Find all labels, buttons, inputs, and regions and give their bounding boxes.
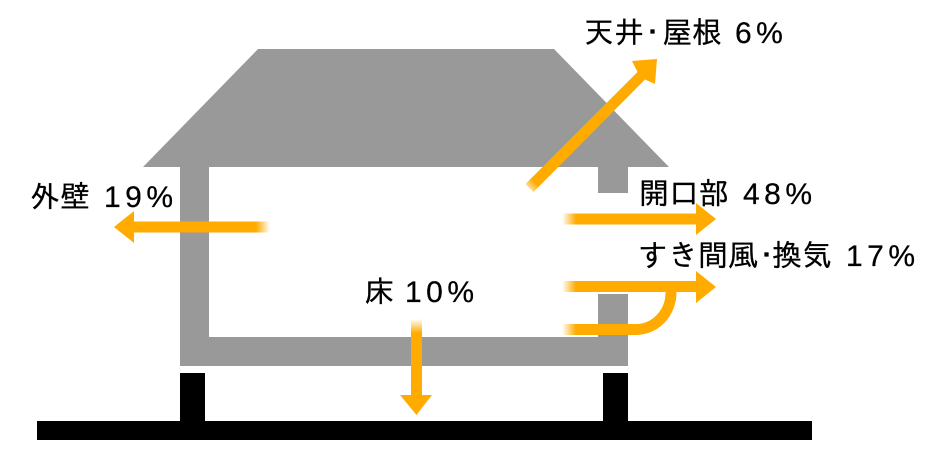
label: ceiling and roof: 6% (735, 17, 787, 50)
left footing (180, 373, 205, 422)
label: draught and ventilation: 17% (846, 240, 920, 273)
label: openings: 48% (743, 178, 817, 211)
arrow: ceiling and roof loss (526, 59, 657, 192)
arrow: floor loss (400, 319, 432, 415)
floor slab (180, 337, 628, 366)
foundation (37, 373, 812, 440)
arrow: ventilation curved (562, 292, 671, 330)
ground (37, 421, 812, 440)
label: draught and ventilation: ･ (759, 240, 774, 273)
label: ceiling and roof: 天井 (584, 17, 644, 50)
label: floor: 床 (364, 276, 394, 309)
arrow: draught and ventilation loss (562, 271, 716, 330)
left wall (180, 167, 209, 366)
label: floor: 10% (405, 276, 479, 309)
arrow: external wall loss (114, 211, 270, 243)
roof (143, 49, 669, 167)
label: external wall: 19% (104, 181, 178, 214)
house: grey section (143, 49, 669, 366)
right wall lower (598, 294, 628, 366)
right footing (603, 373, 628, 422)
label: draught and ventilation: すき間風 (638, 240, 758, 273)
arrow: openings loss (562, 203, 716, 235)
label: openings: 開口部 (639, 178, 729, 211)
arrow: draught straight (562, 271, 716, 303)
label: ceiling and roof: ･ (645, 17, 660, 50)
label: draught and ventilation: 換気 (772, 240, 832, 273)
right wall upper (598, 167, 628, 193)
label: external wall: 外壁 (30, 181, 90, 214)
label: ceiling and roof: 屋根 (662, 17, 722, 50)
